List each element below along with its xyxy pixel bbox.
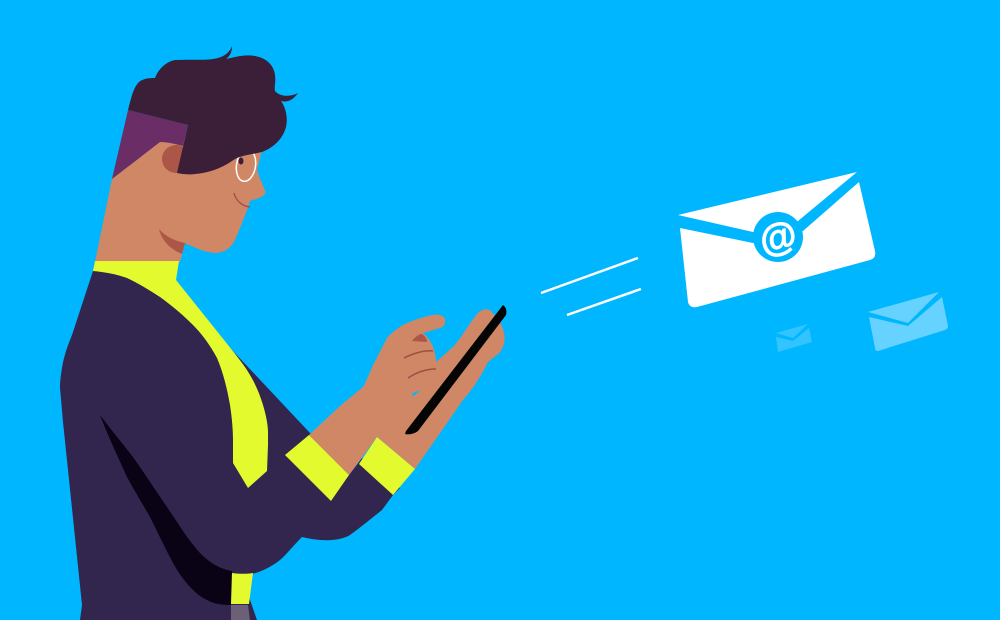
finger crease 2	[408, 369, 436, 378]
collar and tie	[93, 261, 268, 488]
shaved hair side	[112, 110, 188, 179]
finger gap	[412, 390, 421, 397]
neck and face	[95, 130, 266, 262]
small envelope flap	[776, 324, 808, 338]
shirt tail	[231, 573, 253, 604]
smile	[234, 193, 250, 207]
jacket	[60, 265, 400, 620]
glasses	[234, 148, 258, 183]
phone	[405, 305, 506, 434]
motion line 2	[567, 289, 641, 315]
small envelope	[776, 324, 812, 352]
shirt tail shade	[231, 605, 250, 620]
ear	[162, 145, 190, 173]
jacket fold shadow	[100, 415, 232, 605]
small envelope body	[776, 328, 812, 352]
hair	[128, 46, 298, 174]
at sign: @	[755, 213, 801, 263]
medium envelope body	[869, 297, 948, 351]
medium envelope	[868, 292, 948, 351]
person	[60, 46, 506, 620]
large envelope	[678, 172, 875, 307]
finger crease 1	[404, 351, 433, 358]
at sign badge	[753, 212, 803, 262]
fingernail	[412, 334, 427, 342]
envelope flap	[678, 172, 857, 237]
right cuff	[359, 437, 415, 495]
eye	[238, 158, 244, 164]
medium envelope flap	[868, 292, 939, 323]
neck shadow	[159, 229, 185, 254]
left cuff	[285, 435, 349, 501]
envelope body	[680, 182, 875, 307]
motion line 1	[541, 258, 638, 293]
forearm and hand	[309, 309, 505, 475]
